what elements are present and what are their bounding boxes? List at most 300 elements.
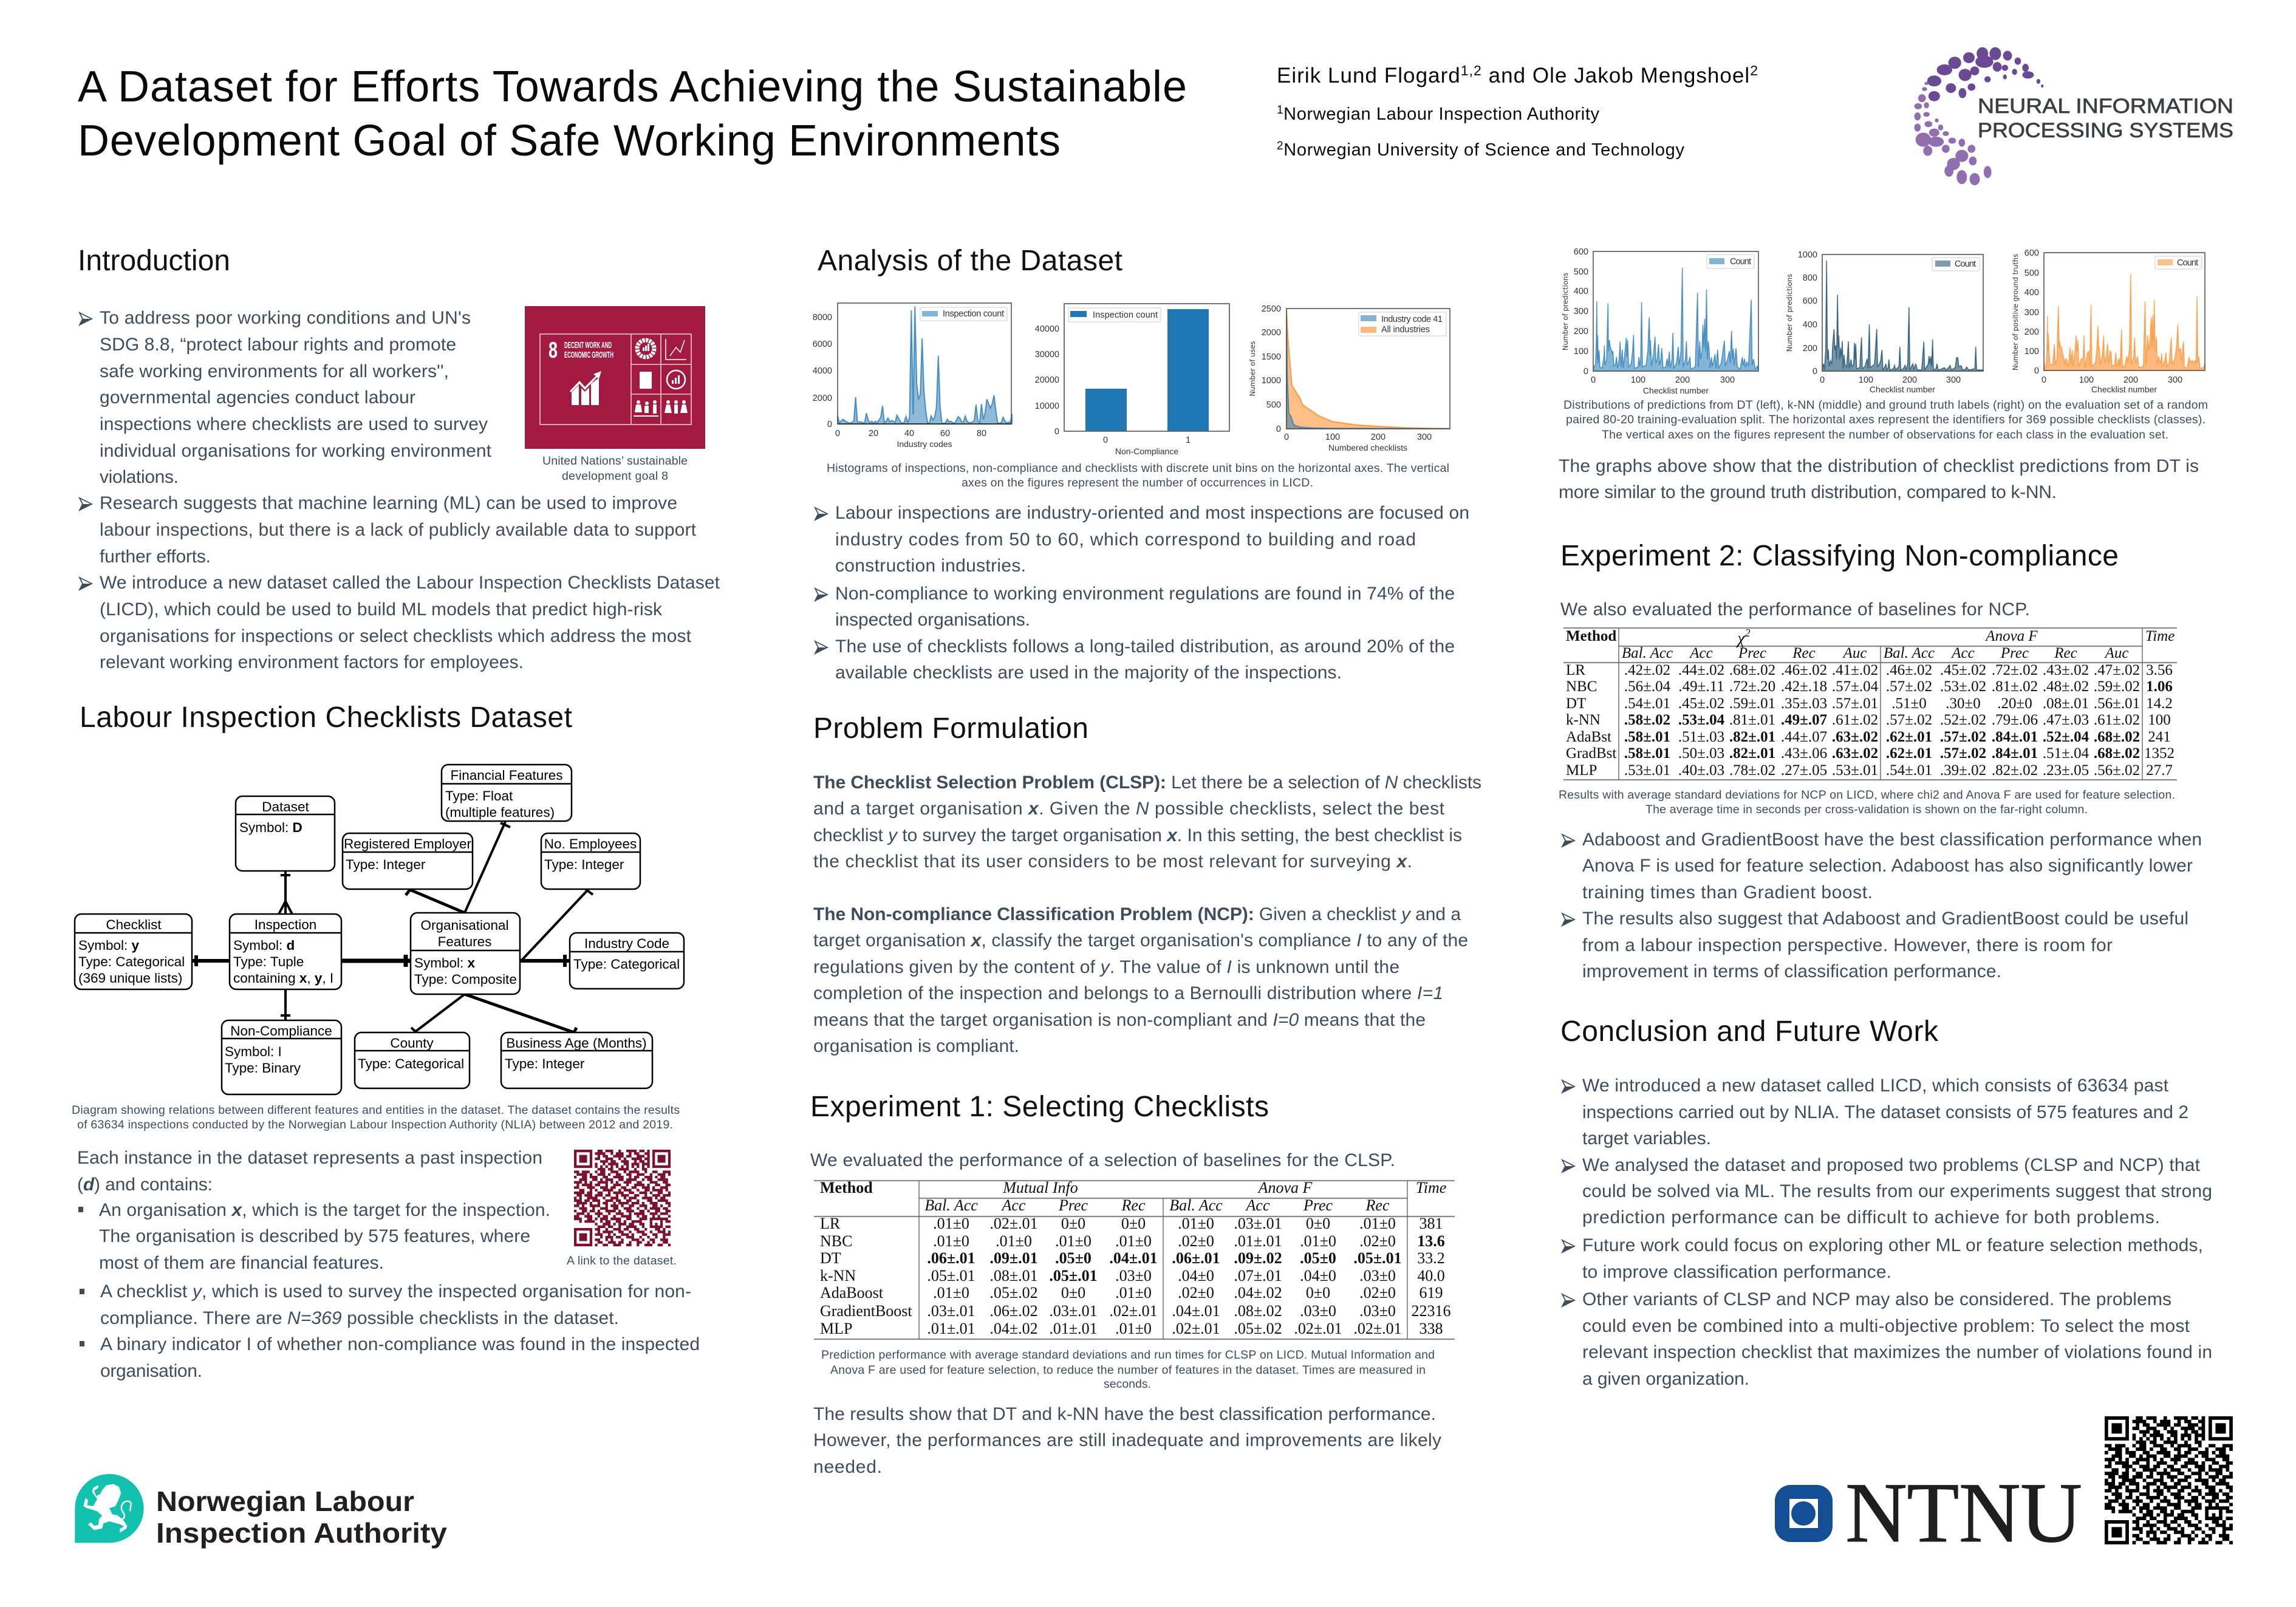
chart: k-NN prediction distribution: Number of predictions bbox=[1785, 274, 1794, 352]
bullet: future work: to improve classification performance. bbox=[1582, 1262, 1891, 1282]
entity: checklist: Symbol: y bbox=[78, 938, 140, 953]
chart: ground truth distribution: 200 bbox=[2024, 327, 2039, 337]
text block: distribution findings: The graphs above show that the distribution of checklist predictions from DT is bbox=[1559, 456, 2199, 476]
icon: NTNU blue emblem bbox=[1775, 1485, 1833, 1542]
table: CLSP results: 13.6 bbox=[1417, 1232, 1445, 1250]
entity: number of employees: Type: Integer bbox=[544, 857, 624, 872]
bullet: long tailed checklists bbox=[815, 636, 1455, 683]
table: NCP results: 241 bbox=[2148, 729, 2171, 745]
bullet: analysis summary: could be solved via ML. The results from our experiments suggest that strong bbox=[1582, 1181, 2212, 1201]
table: NCP results: .42±.02 bbox=[1624, 662, 1670, 678]
chart: checklist use long tail: 2000 bbox=[1262, 328, 1281, 338]
table: CLSP results: .03±0 bbox=[1115, 1267, 1152, 1285]
bullet: binary indicator: organisation. bbox=[100, 1361, 202, 1381]
table: NCP results: .52±.02 bbox=[1940, 712, 1986, 728]
table: CLSP results: .01±.01 bbox=[927, 1320, 975, 1337]
NeurIPS wordmark: NEURAL INFORMATION bbox=[1978, 95, 2233, 118]
chart: non-compliance bars: 0 bbox=[1054, 427, 1059, 437]
chart: ground truth distribution: 0 bbox=[2041, 375, 2046, 385]
table: CLSP results: Rec bbox=[1121, 1196, 1146, 1214]
table: NCP results: .54±.01 bbox=[1624, 695, 1670, 712]
bullet: SDG 8.8 context: safe working environments for all workers'', bbox=[100, 361, 449, 381]
table: NCP results: .47±.02 bbox=[2094, 662, 2140, 678]
table: NCP results: .57±.04 bbox=[1832, 678, 1879, 695]
chart: ground truth distribution: 100 bbox=[2024, 347, 2039, 357]
table: NCP results: 3.56 bbox=[2146, 662, 2173, 678]
text block: experiment 1 results bbox=[813, 1404, 1441, 1477]
chart: checklist use long tail: 100 bbox=[1325, 432, 1340, 442]
caption: distributions: Distributions of predictions from DT (left), k-NN (middle) and ground truth labels (right) on the evaluation set of a random bbox=[1563, 398, 2208, 412]
authors and affiliations: 2 bbox=[1277, 140, 1283, 152]
table: CLSP results: AdaBoost bbox=[820, 1284, 884, 1302]
bullet: usefulness: The results also suggest that Adaboost and GradientBoost could be useful bbox=[1582, 909, 2188, 929]
bullet: industry orientation: construction industries. bbox=[835, 556, 1026, 576]
table: NCP results: .61±.02 bbox=[1832, 712, 1878, 728]
entity: business age bbox=[501, 1032, 652, 1088]
icon: SDG goal 8 card bbox=[525, 306, 705, 449]
entity: non-compliance bbox=[222, 1020, 341, 1094]
bullet: other variants: could even be combined into a multi-objective problem: To select the most bbox=[1582, 1316, 2190, 1336]
table: CLSP results: .02±0 bbox=[1178, 1232, 1214, 1250]
entity: checklist: (369 unique lists) bbox=[78, 971, 182, 986]
heading: experiment 1: Experiment 1: Selecting Checklists bbox=[810, 1091, 1269, 1123]
bullet: adaboost and gradient boost: Anova F is used for feature selection. Adaboost has also significantly lower bbox=[1582, 856, 2193, 876]
chart: checklist use long tail: 2500 bbox=[1262, 304, 1281, 314]
bullet: SDG 8.8 context: inspections where checklists are used to survey bbox=[100, 414, 488, 434]
table: NCP results: .72±.20 bbox=[1729, 678, 1775, 695]
table: CLSP results: Prec bbox=[1303, 1196, 1333, 1214]
bullet: binary indicator bbox=[80, 1334, 700, 1381]
chart: DT prediction distribution: 100 bbox=[1574, 347, 1588, 357]
table: NCP results: Rec bbox=[1792, 645, 1816, 661]
table: CLSP results: 22316 bbox=[1412, 1302, 1450, 1320]
table: CLSP results: .01±0 bbox=[1115, 1320, 1152, 1337]
text block: experiment 1 intro: We evaluated the performance of a selection of baselines for the CLSP. bbox=[810, 1150, 1395, 1170]
table: CLSP results: .05±.02 bbox=[989, 1284, 1038, 1302]
table: NCP results: .30±0 bbox=[1946, 695, 1981, 712]
chart: inspections by industry code: 20 bbox=[869, 429, 878, 438]
table: CLSP results bbox=[814, 1179, 1455, 1339]
text block: experiment 1 results: needed. bbox=[813, 1457, 882, 1477]
caption: CLSP table: Anova F are used for feature selection, to reduce the number of features in the dataset. Times are measured in bbox=[830, 1363, 1426, 1377]
table: CLSP results: 0±0 bbox=[1306, 1284, 1330, 1302]
bullet: binary indicator: A binary indicator I of whether non-compliance was found in the inspected bbox=[100, 1334, 700, 1354]
entity: financial features bbox=[442, 765, 572, 821]
table: NCP results: .79±.06 bbox=[1992, 712, 2038, 728]
table: CLSP results: Prec bbox=[1058, 1196, 1088, 1214]
table: CLSP results: .05±.01 bbox=[1353, 1249, 1402, 1267]
text block: CLSP: and a target organisation x. Given the N possible checklists, select the best bbox=[813, 799, 1445, 819]
caption: CLSP table: Prediction performance with average standard deviations and run times for CLSP on LICD. Mutual Information and bbox=[821, 1348, 1435, 1362]
bullet: adaboost and gradient boost: Adaboost and GradientBoost have the best classification performance when bbox=[1582, 830, 2202, 850]
table: NCP results: .57±.02 bbox=[1940, 745, 1986, 762]
table: NCP results: .20±0 bbox=[1997, 695, 2032, 712]
panel: problem formulation bbox=[813, 712, 1481, 1056]
chart: inspections by industry code: 80 bbox=[977, 429, 986, 438]
table: CLSP results: 619 bbox=[1419, 1284, 1443, 1302]
chart: DT prediction distribution: 200 bbox=[1675, 375, 1690, 385]
chart: DT prediction distribution: 600 bbox=[1574, 247, 1588, 257]
table: NCP results: .42±.18 bbox=[1781, 678, 1827, 695]
table: CLSP results: Time bbox=[1416, 1179, 1446, 1196]
table: NCP results: .51±.04 bbox=[2043, 745, 2089, 762]
chart: k-NN prediction distribution: 0 bbox=[1820, 375, 1825, 385]
chart: non-compliance bars: 40000 bbox=[1035, 324, 1059, 334]
text block: NCP: completion of the inspection and belongs to a Bernoulli distribution where I=1 bbox=[813, 983, 1443, 1003]
chart: checklist use long tail: Number of uses bbox=[1248, 341, 1257, 396]
panel: introduction bbox=[78, 245, 720, 672]
text block: NCP: The Non-compliance Classification Problem (NCP): Given a checklist y and a bbox=[813, 904, 1461, 924]
entity: registered employer: Registered Employer bbox=[344, 836, 472, 851]
table: NCP results: .59±.02 bbox=[2094, 678, 2140, 695]
table: CLSP results: .06±.01 bbox=[927, 1249, 975, 1267]
chart: ground truth distribution: 300 bbox=[2024, 308, 2039, 318]
table: NCP results: NBC bbox=[1566, 678, 1597, 695]
bullet: SDG 8.8 context: individual organisations for working environment bbox=[100, 441, 492, 461]
table: NCP results: .45±.02 bbox=[1678, 695, 1724, 712]
bullet: organisation: The organisation is described by 575 features, where bbox=[99, 1226, 530, 1246]
bullet: LICD dataset bbox=[80, 573, 720, 672]
text block: NCP: means that the target organisation is non-compliant and I=0 means that the bbox=[813, 1010, 1426, 1030]
table: NCP results: 1352 bbox=[2144, 745, 2175, 762]
caption: distributions bbox=[1563, 398, 2208, 442]
table: NCP results: .68±.02 bbox=[2094, 729, 2140, 745]
diagram: entity relations bbox=[75, 765, 684, 1094]
text block: CLSP: The Checklist Selection Problem (CLSP): Let there be a selection of N checklists bbox=[813, 773, 1481, 793]
table: NCP results: .49±.07 bbox=[1781, 712, 1827, 728]
table: CLSP results: .03±.01 bbox=[1049, 1302, 1098, 1320]
chart: ground truth distribution bbox=[2011, 248, 2205, 394]
bullet: LICD dataset: We introduce a new dataset called the Labour Inspection Checklists Dataset bbox=[100, 573, 720, 593]
table: CLSP results: .01±0 bbox=[1115, 1232, 1152, 1250]
entity: inspection: Symbol: d bbox=[233, 938, 295, 953]
bullet: dataset summary: target variables. bbox=[1582, 1128, 1711, 1148]
table: NCP results: χ bbox=[1737, 629, 1745, 648]
text block: CLSP bbox=[813, 773, 1481, 872]
table: CLSP results: .09±.01 bbox=[989, 1249, 1038, 1267]
table: NCP results: .58±.01 bbox=[1624, 729, 1670, 745]
title: A Dataset for Efforts Towards Achieving the Sustainable bbox=[78, 63, 1187, 111]
bullet: organisation: An organisation x, which is the target for the inspection. bbox=[99, 1200, 550, 1220]
bullet: dataset summary: inspections carried out by NLIA. The dataset consists of 575 features and 2 bbox=[1582, 1102, 2188, 1122]
panel: analysis of the dataset bbox=[813, 245, 1469, 683]
chart: checklist use long tail: 1500 bbox=[1262, 352, 1281, 362]
caption: distributions: paired 80-20 training-evaluation split. The horizontal axes represent the identifiers for 369 possible checklists (classes). bbox=[1566, 413, 2205, 426]
bullet: future work: Future work could focus on exploring other ML or feature selection methods, bbox=[1582, 1235, 2203, 1255]
entity: number of employees: No. Employees bbox=[544, 836, 637, 851]
table: NCP results: Method bbox=[1566, 628, 1616, 644]
chart: checklist use long tail: Industry code 41 bbox=[1381, 315, 1443, 324]
logo: NTNU bbox=[1775, 1465, 2082, 1560]
entity: checklist bbox=[75, 914, 192, 989]
table: CLSP results: .01±0 bbox=[1359, 1215, 1396, 1232]
chart: DT prediction distribution: 300 bbox=[1720, 375, 1735, 385]
bullet: dataset summary bbox=[1562, 1076, 2188, 1148]
entity: non-compliance: Non-Compliance bbox=[230, 1023, 332, 1039]
chart: inspections by industry code: 0 bbox=[835, 429, 840, 438]
caption: NCP table: Results with average standard deviations for NCP on LICD, where chi2 and Anova F are used for feature selection. bbox=[1559, 788, 2175, 802]
chart: DT prediction distribution: 0 bbox=[1591, 375, 1596, 385]
bullet: SDG 8.8 context: governmental agencies conduct labour bbox=[100, 387, 415, 408]
logo: NeurIPS bbox=[1915, 47, 2233, 185]
table: CLSP results: .02±.01 bbox=[1172, 1320, 1220, 1337]
bullet: non-compliance share: inspected organisations. bbox=[835, 610, 1030, 630]
chart: ground truth distribution: 200 bbox=[2123, 375, 2138, 385]
table: NCP results: .78±.02 bbox=[1729, 762, 1775, 779]
table: NCP results: .53±.01 bbox=[1832, 762, 1878, 779]
entity: industry code: Industry Code bbox=[584, 936, 669, 951]
table: CLSP results: .04±0 bbox=[1178, 1267, 1214, 1285]
text block: NCP: target organisation x, classify the target organisation's compliance I to any of the bbox=[813, 930, 1468, 950]
table: NCP results: .47±.03 bbox=[2043, 712, 2089, 728]
table: NCP results: Auc bbox=[2104, 645, 2128, 661]
text block: CLSP: the checklist that its user considers to be most relevant for surveying x. bbox=[813, 851, 1412, 872]
table: NCP results: .59±.01 bbox=[1729, 695, 1775, 712]
table: NCP results: .35±.03 bbox=[1781, 695, 1827, 712]
bullet: machine learning bbox=[80, 493, 697, 567]
table: NCP results: Bal. Acc bbox=[1884, 645, 1935, 661]
table: NCP results: .56±.04 bbox=[1624, 678, 1671, 695]
table: NCP results: .82±.01 bbox=[1729, 745, 1775, 762]
table: CLSP results: .03±.01 bbox=[927, 1302, 975, 1320]
table: NCP results: .50±.03 bbox=[1678, 745, 1724, 762]
table: NCP results: .43±.06 bbox=[1781, 745, 1827, 762]
bullet: adaboost and gradient boost: training times than Gradient boost. bbox=[1582, 882, 1873, 902]
chart: DT prediction distribution bbox=[1561, 247, 1758, 395]
table: CLSP results: .06±.01 bbox=[1172, 1249, 1220, 1267]
chart: non-compliance bars: 20000 bbox=[1035, 375, 1059, 385]
table: CLSP results: .04±0 bbox=[1300, 1267, 1336, 1285]
bullet: checklist: A checklist y, which is used to survey the inspected organisation for non- bbox=[100, 1281, 691, 1302]
chart: k-NN prediction distribution: 400 bbox=[1803, 320, 1817, 330]
table: NCP results: .53±.02 bbox=[1940, 678, 1986, 695]
table: NCP results: .62±.01 bbox=[1886, 745, 1932, 762]
heading: introduction: Introduction bbox=[78, 245, 230, 277]
authors and affiliations: 1 bbox=[1277, 104, 1283, 117]
authors and affiliations: Eirik Lund Flogard bbox=[1277, 64, 1460, 87]
chart: inspections by industry code: 40 bbox=[904, 429, 914, 438]
table: NCP results: .56±.02 bbox=[2094, 762, 2140, 779]
bullet: checklist: compliance. There are N=369 possible checklists in the dataset. bbox=[100, 1308, 619, 1328]
table: CLSP results: Anova F bbox=[1257, 1179, 1313, 1196]
authors and affiliations: 2 bbox=[1750, 63, 1758, 78]
table: NCP results: Acc bbox=[1950, 645, 1975, 661]
entity: dataset: Symbol: D bbox=[239, 820, 302, 835]
table: NCP results: .45±.02 bbox=[1940, 662, 1986, 678]
icon: SDG goal 8 card: DECENT WORK AND bbox=[564, 340, 612, 350]
table: NCP results: .72±.02 bbox=[1992, 662, 2038, 678]
table: NCP results: k-NN bbox=[1566, 712, 1601, 728]
table: NCP results: .82±.01 bbox=[1729, 729, 1775, 745]
table: CLSP results: .08±.02 bbox=[1234, 1302, 1282, 1320]
title: Development Goal of Safe Working Environments bbox=[78, 117, 1061, 165]
table: NCP results: .51±0 bbox=[1891, 695, 1927, 712]
table: CLSP results: .03±0 bbox=[1359, 1302, 1396, 1320]
entity: non-compliance: Type: Binary bbox=[225, 1060, 301, 1076]
chart: ground truth distribution: 100 bbox=[2079, 375, 2094, 385]
table: CLSP results: DT bbox=[820, 1249, 841, 1267]
table: NCP results: .46±.02 bbox=[1886, 662, 1932, 678]
table: CLSP results: GradientBoost bbox=[820, 1302, 912, 1320]
panel: experiment 1 bbox=[810, 1091, 1455, 1477]
chart: DT prediction distribution: Checklist number bbox=[1643, 386, 1709, 395]
table: CLSP results: .02±.01 bbox=[1353, 1320, 1402, 1337]
table: CLSP results: NBC bbox=[820, 1232, 852, 1250]
table: CLSP results: .01±0 bbox=[933, 1215, 969, 1232]
chart: inspections by industry code: 6000 bbox=[813, 339, 832, 349]
wordmark: Inspection Authority bbox=[156, 1517, 447, 1549]
table: NCP results: .57±.02 bbox=[1886, 712, 1932, 728]
chart: k-NN prediction distribution: Count bbox=[1955, 259, 1976, 269]
chart: k-NN prediction distribution: Checklist number bbox=[1870, 384, 1935, 394]
entity: inspection bbox=[230, 914, 341, 989]
chart: DT prediction distribution: 500 bbox=[1574, 267, 1588, 277]
bullet: SDG 8.8 context bbox=[80, 308, 492, 487]
caption: SDG goal 8: United Nations’ sustainable bbox=[542, 454, 688, 468]
chart: k-NN prediction distribution: 1000 bbox=[1798, 250, 1817, 260]
bullet: checklist bbox=[80, 1281, 691, 1328]
authors and affiliations: 1,2 bbox=[1461, 63, 1481, 78]
table: CLSP results: .01±.01 bbox=[1234, 1232, 1282, 1250]
icon: QR code link to the dataset bbox=[574, 1150, 671, 1246]
table: CLSP results: Bal. Acc bbox=[924, 1196, 978, 1214]
chart: DT prediction distribution: 400 bbox=[1574, 287, 1588, 296]
table: CLSP results: .01±0 bbox=[933, 1284, 969, 1302]
NeurIPS wordmark: PROCESSING SYSTEMS bbox=[1978, 119, 2233, 142]
caption: histograms: Histograms of inspections, non-compliance and checklists with discrete unit bins on the horizontal axes. The vertical bbox=[827, 462, 1449, 475]
authors and affiliations bbox=[1277, 63, 1758, 160]
bullet: SDG 8.8 context: violations. bbox=[100, 467, 179, 487]
table: CLSP results: .03±.01 bbox=[1234, 1215, 1282, 1232]
table: CLSP results: 33.2 bbox=[1417, 1249, 1445, 1267]
bullet: long tailed checklists: available checklists are used in the majority of the inspections. bbox=[835, 663, 1342, 683]
table: NCP results: .08±.01 bbox=[2043, 695, 2089, 712]
bullet: long tailed checklists: The use of checklists follows a long-tailed distribution, as around 20% of the bbox=[835, 636, 1455, 657]
heading: problem formulation: Problem Formulation bbox=[813, 712, 1088, 745]
chart: DT prediction distribution: Number of predictions bbox=[1561, 273, 1570, 350]
table: CLSP results: .01±0 bbox=[1178, 1215, 1214, 1232]
table: CLSP results: Acc bbox=[1001, 1196, 1026, 1214]
bullet: other variants: relevant inspection checklist that maximizes the number of violations found in bbox=[1582, 1342, 2212, 1362]
text block: experiment 1 results: The results show that DT and k-NN have the best classification performance. bbox=[813, 1404, 1436, 1424]
entity: financial features: (multiple features) bbox=[445, 805, 555, 820]
entity: organisational features: Symbol: x bbox=[414, 955, 476, 971]
caption: CLSP table bbox=[821, 1348, 1435, 1391]
chart: ground truth distribution: 500 bbox=[2024, 268, 2039, 278]
table: NCP results: .53±.04 bbox=[1678, 712, 1725, 728]
table: CLSP results: .01±0 bbox=[1300, 1232, 1336, 1250]
table: CLSP results: .05±0 bbox=[1300, 1249, 1336, 1267]
table: NCP results: .57±.02 bbox=[1886, 678, 1932, 695]
table: CLSP results: .09±.02 bbox=[1234, 1249, 1282, 1267]
caption: SDG goal 8: development goal 8 bbox=[562, 469, 668, 483]
table: NCP results: 1.06 bbox=[2146, 678, 2173, 695]
chart: k-NN prediction distribution: 200 bbox=[1803, 344, 1817, 353]
table: NCP results: Rec bbox=[2054, 645, 2077, 661]
entity: business age: Business Age (Months) bbox=[506, 1036, 647, 1051]
entity: checklist: Checklist bbox=[106, 917, 162, 932]
chart: DT prediction distribution: Count bbox=[1730, 257, 1751, 267]
entity: organisational features: Type: Composite bbox=[414, 972, 517, 987]
entity: financial features: Financial Features bbox=[450, 768, 563, 783]
chart: inspections by industry code: 4000 bbox=[813, 366, 832, 376]
table: NCP results: Acc bbox=[1689, 645, 1713, 661]
text block: NCP: regulations given by the content of y. The value of I is unknown until the bbox=[813, 957, 1399, 977]
heading: experiment 2: Experiment 2: Classifying Non-compliance bbox=[1560, 540, 2119, 572]
table: CLSP results: .03±0 bbox=[1300, 1302, 1336, 1320]
table: CLSP results: .07±.01 bbox=[1234, 1267, 1282, 1285]
wordmark bbox=[156, 1486, 447, 1549]
chart: inspections by industry code: Industry codes bbox=[897, 439, 952, 449]
table: CLSP results: .04±.02 bbox=[989, 1320, 1038, 1337]
caption: diagram: of 63634 inspections conducted by the Norwegian Labour Inspection Authority (NLIA) between 2012 and 2019. bbox=[77, 1118, 673, 1131]
bullet: analysis summary: prediction performance can be difficult to achieve for both problems. bbox=[1582, 1207, 2160, 1227]
entity: checklist: Type: Categorical bbox=[78, 954, 185, 969]
bullet: analysis summary: We analysed the dataset and proposed two problems (CLSP and NCP) that bbox=[1582, 1155, 2201, 1175]
text block: instance description: Each instance in the dataset represents a past inspection bbox=[77, 1148, 542, 1168]
table: NCP results: .68±.02 bbox=[2094, 745, 2140, 762]
table: CLSP results: 0±0 bbox=[1306, 1215, 1330, 1232]
table: NCP results: .52±.04 bbox=[2043, 729, 2089, 745]
table: NCP results: .41±.02 bbox=[1832, 662, 1878, 678]
chart: k-NN prediction distribution: 600 bbox=[1803, 296, 1817, 306]
text block: distribution findings bbox=[1559, 456, 2199, 502]
table: NCP results: .63±.02 bbox=[1832, 729, 1878, 745]
icon: teal lion emblem bbox=[75, 1474, 144, 1543]
table: NCP results: .39±.02 bbox=[1940, 762, 1986, 779]
entity: organisational features: Features bbox=[438, 934, 491, 949]
table: CLSP results: 0±0 bbox=[1121, 1215, 1146, 1232]
table: CLSP results: .02±0 bbox=[1359, 1232, 1396, 1250]
table: CLSP results: .08±.01 bbox=[989, 1267, 1038, 1285]
caption: NCP table bbox=[1559, 788, 2175, 816]
authors and affiliations: Norwegian Labour Inspection Authority bbox=[1283, 104, 1600, 124]
bullet: analysis summary bbox=[1562, 1155, 2212, 1227]
entity: dataset bbox=[236, 796, 335, 871]
title bbox=[78, 63, 1187, 165]
bullet: machine learning: Research suggests that machine learning (ML) can be used to improve bbox=[100, 493, 677, 513]
table: NCP results: .63±.02 bbox=[1832, 745, 1878, 762]
chart: non-compliance bars: Inspection count bbox=[1093, 310, 1158, 320]
chart: ground truth distribution: Checklist number bbox=[2091, 384, 2157, 394]
entity: county bbox=[355, 1032, 470, 1088]
table: NCP results: LR bbox=[1566, 662, 1585, 678]
chart: DT prediction distribution: 100 bbox=[1631, 375, 1645, 385]
chart: ground truth distribution: 0 bbox=[2034, 366, 2039, 376]
table: NCP results: MLP bbox=[1566, 762, 1597, 779]
table: NCP results: Anova F bbox=[1984, 628, 2038, 644]
bullet: machine learning: labour inspections, but there is a lack of publicly available data to support bbox=[100, 520, 697, 540]
icon: QR code bottom right bbox=[2105, 1416, 2233, 1544]
authors and affiliations: Norwegian University of Science and Technology bbox=[1283, 140, 1685, 160]
chart: non-compliance bars: Non-Compliance bbox=[1115, 446, 1178, 456]
bullet: SDG 8.8 context: To address poor working conditions and UN's bbox=[100, 308, 471, 328]
chart: checklist use long tail bbox=[1248, 304, 1450, 452]
bullet: industry orientation bbox=[815, 503, 1469, 576]
chart: inspections by industry code: Inspection count bbox=[943, 309, 1004, 319]
table: NCP results bbox=[1563, 627, 2177, 780]
table: CLSP results: .01±0 bbox=[1115, 1284, 1152, 1302]
table: NCP results: .43±.02 bbox=[2043, 662, 2089, 678]
table: CLSP results: .02±0 bbox=[1178, 1284, 1214, 1302]
chart: k-NN prediction distribution bbox=[1785, 250, 1983, 394]
connectors between entities bbox=[192, 822, 593, 1037]
table: CLSP results: 0±0 bbox=[1061, 1284, 1085, 1302]
table: NCP results: Auc bbox=[1842, 645, 1867, 661]
chart: non-compliance bars bbox=[1035, 304, 1229, 456]
table: CLSP results: 381 bbox=[1419, 1215, 1443, 1232]
text block: distribution findings: more similar to the ground truth distribution, compared to k-NN. bbox=[1559, 482, 2057, 502]
